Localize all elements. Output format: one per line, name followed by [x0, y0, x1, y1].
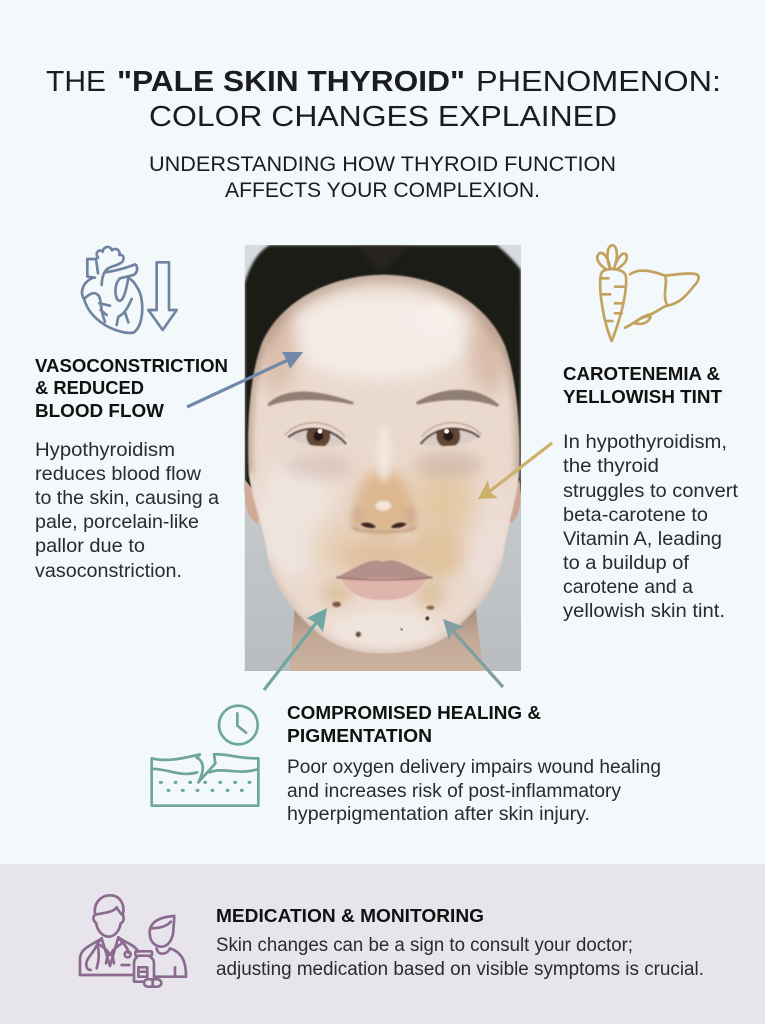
heading: vasoconstriction: BLOOD FLOW — [35, 401, 164, 421]
text: carotenemia description: carotene and a — [563, 577, 693, 598]
title: THE — [46, 66, 106, 98]
heading: carotenemia — [563, 364, 722, 407]
text: carotenemia description: to a buildup of — [563, 553, 690, 574]
text: vasoconstriction description — [35, 440, 219, 582]
heading: compromised healing — [287, 703, 541, 746]
icon: carrot and liver — [597, 245, 699, 341]
title: COLOR CHANGES EXPLAINED — [149, 101, 617, 133]
arrow: grey teal to right chin — [443, 619, 503, 687]
text: carotenemia description — [563, 432, 739, 622]
text: carotenemia description: In hypothyroidism, — [563, 432, 727, 453]
text: carotenemia description: Vitamin A, leading — [563, 529, 722, 550]
title: PHENOMENON: — [476, 66, 721, 98]
text: carotenemia description: struggles to convert — [563, 481, 739, 502]
heading: vasoconstriction: VASOCONSTRICTION — [35, 356, 228, 376]
heading: carotenemia: CAROTENEMIA & — [563, 364, 720, 384]
heading: carotenemia: YELLOWISH TINT — [563, 387, 722, 407]
arrow: teal to left chin — [264, 608, 327, 690]
icon: heart with down arrow — [82, 247, 177, 333]
text: medication description: adjusting medication based on visible symptoms is crucial. — [216, 959, 704, 980]
text: vasoconstriction description: reduces blood flow — [35, 464, 201, 485]
text: carotenemia description: beta-carotene to — [563, 505, 708, 526]
text: compromised healing description — [287, 757, 661, 825]
text: medication description — [216, 935, 704, 980]
text: vasoconstriction description: pale, porcelain-like — [35, 512, 199, 533]
heading: compromised healing: PIGMENTATION — [287, 726, 432, 746]
text: medication description: Skin changes can be a sign to consult your doctor; — [216, 935, 633, 956]
arrow: gold to cheek — [478, 443, 552, 499]
icon: doctor, patient and pill bottle — [80, 895, 186, 987]
text: carotenemia description: the thyroid — [563, 456, 659, 477]
text: compromised healing description: Poor oxygen delivery impairs wound healing — [287, 757, 661, 778]
heading: vasoconstriction: & REDUCED — [35, 378, 144, 398]
title: "PALE SKIN THYROID" — [117, 66, 465, 98]
title — [46, 66, 721, 133]
subtitle: UNDERSTANDING HOW THYROID FUNCTION — [149, 153, 616, 176]
text: vasoconstriction description: pallor due to — [35, 536, 145, 557]
text: vasoconstriction description: to the skin, causing a — [35, 488, 219, 509]
subtitle — [149, 153, 616, 202]
heading: compromised healing: COMPROMISED HEALING & — [287, 703, 541, 723]
text: compromised healing description: and increases risk of post-inflammatory — [287, 781, 622, 802]
heading: vasoconstriction — [35, 356, 228, 421]
icon: wounded skin and clock — [152, 706, 258, 806]
text: vasoconstriction description: vasoconstriction. — [35, 561, 182, 582]
text: compromised healing description: hyperpigmentation after skin injury. — [287, 804, 590, 825]
subtitle: AFFECTS YOUR COMPLEXION. — [225, 179, 540, 202]
portrait photo: face with skin colour changes — [240, 245, 527, 671]
text: vasoconstriction description: Hypothyroidism — [35, 440, 175, 461]
text: carotenemia description: yellowish skin tint. — [563, 601, 725, 622]
heading: medication: MEDICATION & MONITORING — [216, 906, 484, 926]
arrow: blue to forehead — [187, 352, 303, 407]
panel: medication and monitoring — [0, 864, 765, 1024]
